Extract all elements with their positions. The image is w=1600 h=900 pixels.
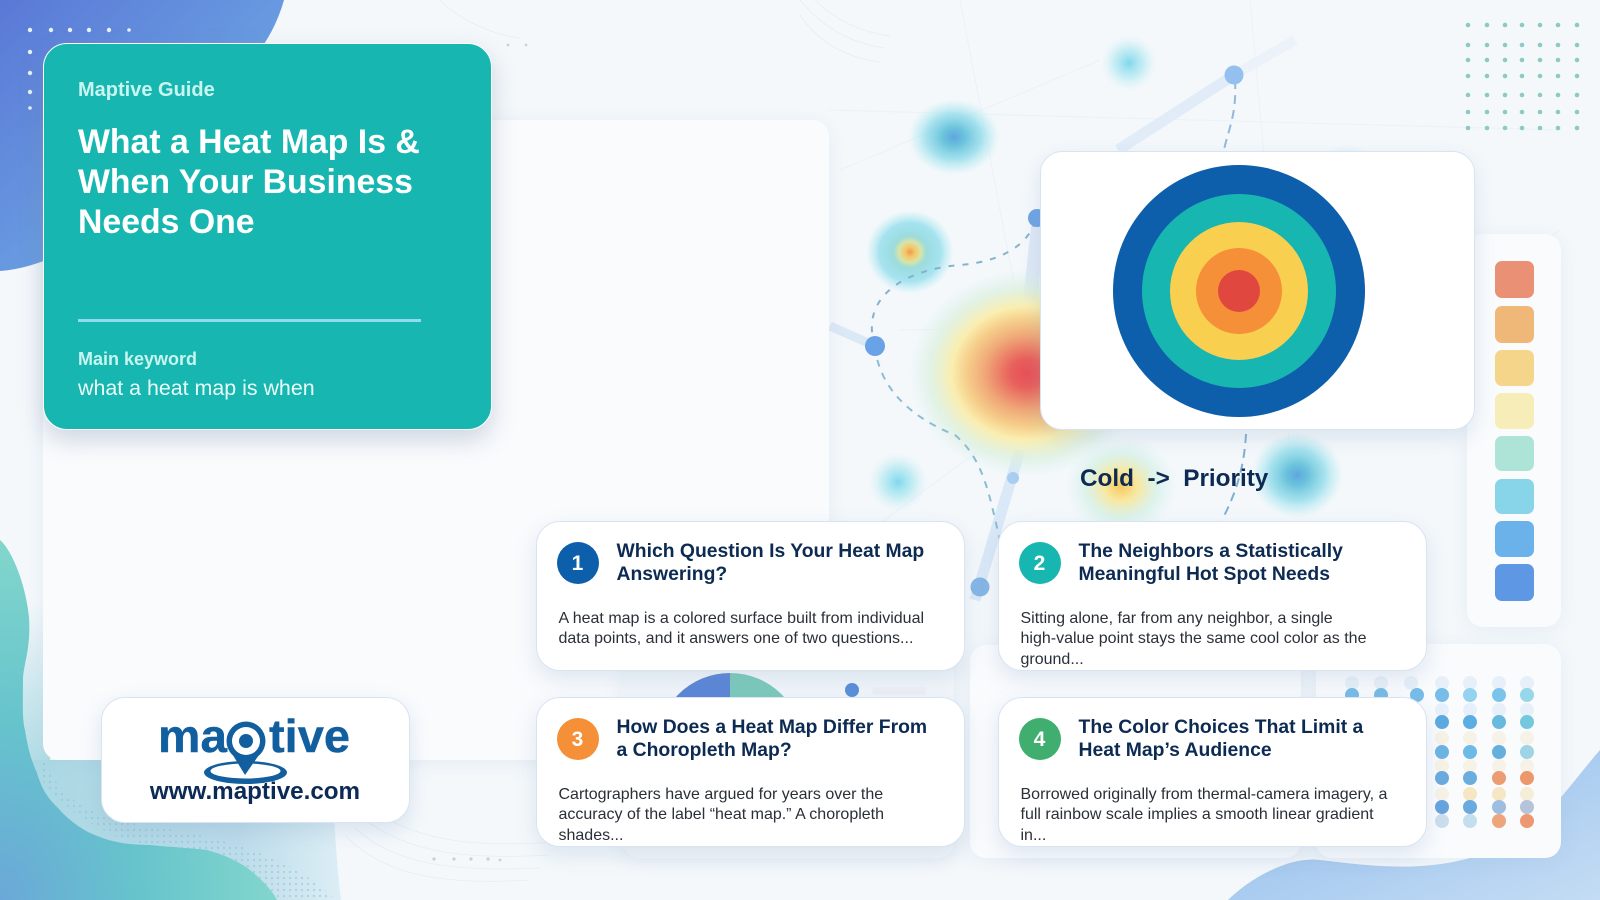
- eyebrow label: Maptive Guide: [78, 79, 215, 101]
- swatch: mint: [1495, 436, 1534, 471]
- panel: heat map card: [1040, 151, 1475, 430]
- body 3: [558, 786, 884, 844]
- body 2: ground...: [1020, 651, 1084, 668]
- panel: color scale legend: [1467, 234, 1561, 627]
- panel: logo card: [101, 697, 410, 823]
- body 2: high-value point stays the same cool color as the: [1020, 630, 1366, 647]
- badge 1: [556, 542, 598, 584]
- heading 2: Meaningful Hot Spot Needs: [1078, 563, 1330, 585]
- maptive logo: tive: [269, 710, 350, 762]
- badge 3: [556, 718, 598, 760]
- heading 3: [616, 716, 927, 761]
- title: [78, 123, 420, 241]
- pie chart: [676, 673, 859, 697]
- swatch: red: [1495, 261, 1534, 298]
- swatch: orange: [1495, 306, 1534, 343]
- badge 4: 4: [1034, 728, 1045, 751]
- title: What a Heat Map Is &: [78, 123, 420, 161]
- heading 1: [616, 540, 924, 585]
- badge 3: 3: [572, 728, 583, 751]
- heading 3: a Choropleth Map?: [616, 739, 792, 761]
- maptive logo: ma: [158, 710, 227, 762]
- swatch: pale yellow: [1495, 393, 1534, 429]
- scale caption: Cold -> Priority: [1080, 465, 1268, 492]
- card 4: [998, 697, 1427, 846]
- swatch: light blue: [1495, 521, 1534, 557]
- heading 2: The Neighbors a Statistically: [1078, 540, 1343, 562]
- body 4: in...: [1020, 827, 1046, 844]
- title: When Your Business: [78, 163, 413, 201]
- maptive logo: [158, 710, 350, 784]
- keyword label: Main keyword: [78, 349, 197, 369]
- heading 1: Answering?: [616, 563, 727, 585]
- panel: pie chart backdrop: [623, 645, 954, 858]
- body 4: [1020, 786, 1388, 844]
- heading 3: How Does a Heat Map Differ From: [616, 716, 927, 738]
- dot matrix: [1345, 676, 1534, 828]
- badge 2: 2: [1034, 552, 1045, 575]
- body 1: A heat map is a colored surface built from individual: [558, 610, 924, 627]
- body 4: Borrowed originally from thermal-camera imagery, a: [1020, 786, 1387, 803]
- large background panel: [43, 120, 829, 760]
- keyword value: what a heat map is when: [78, 376, 315, 400]
- body 2: Sitting alone, far from any neighbor, a single: [1020, 610, 1333, 627]
- body 4: full rainbow scale implies a smooth linear gradient: [1020, 806, 1374, 823]
- heading 4: [1078, 716, 1364, 761]
- badge 2: [1018, 542, 1060, 584]
- heading 4: The Color Choices That Limit a: [1078, 716, 1363, 738]
- title: Needs One: [78, 203, 255, 241]
- heading 4: Heat Map’s Audience: [1078, 739, 1272, 761]
- heading 2: [1078, 540, 1343, 585]
- body 3: Cartographers have argued for years over the: [558, 786, 883, 803]
- divider line: [78, 319, 421, 322]
- badge 4: [1018, 718, 1060, 760]
- card 3: [536, 697, 965, 846]
- swatch: blue: [1495, 564, 1534, 601]
- website url: www.maptive.com: [150, 778, 360, 805]
- heading 1: Which Question Is Your Heat Map: [616, 540, 924, 562]
- badge 1: 1: [572, 552, 583, 575]
- swatch: sky: [1495, 479, 1534, 514]
- body 3: shades...: [558, 827, 623, 844]
- body 2: [1020, 610, 1366, 668]
- panel: title card: [43, 43, 492, 430]
- card 1: [536, 521, 965, 670]
- panel: middle backdrop: [970, 645, 1301, 858]
- panel: dot matrix: [1316, 644, 1561, 858]
- swatch: amber: [1495, 350, 1534, 386]
- card 2: [998, 521, 1427, 670]
- body 3: accuracy of the label “heat map.” A choropleth: [558, 806, 884, 823]
- body 1: data points, and it answers one of two questions...: [558, 630, 913, 647]
- concentric rings icon: [1113, 165, 1365, 417]
- body 1: [558, 610, 924, 647]
